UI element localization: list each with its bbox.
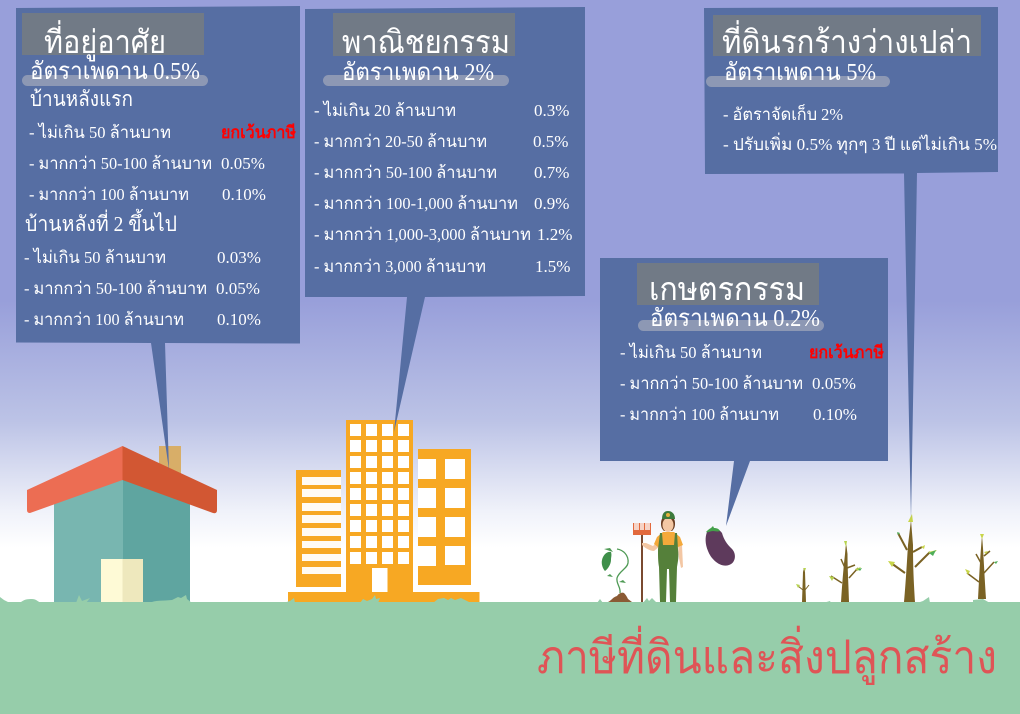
value: 0.05% <box>812 374 856 393</box>
row: - มากกว่า 3,000 ล้านบาท <box>314 257 486 276</box>
rake <box>641 534 643 602</box>
row: - มากกว่า 100-1,000 ล้านบาท <box>314 194 518 213</box>
rate bar <box>22 75 208 86</box>
row: - ไม่เกิน 50 ล้านบาท <box>29 122 171 142</box>
value: 0.10% <box>813 405 857 424</box>
row: - มากกว่า 100 ล้านบาท <box>24 310 184 329</box>
row: - ปรับเพิ่ม 0.5% ทุกๆ 3 ปี แต่ไม่เกิน 5% <box>723 132 997 155</box>
row: - มากกว่า 50-100 ล้านบาท <box>24 279 207 298</box>
panel: residential <box>16 6 300 470</box>
panel: agriculture <box>600 258 888 526</box>
value: 1.2% <box>537 225 572 244</box>
icon: eggplant <box>706 526 735 566</box>
row: - มากกว่า 50-100 ล้านบาท <box>314 163 497 182</box>
heading: ที่ดินรกร้างว่างเปล่า <box>722 20 972 60</box>
icon: office buildings <box>288 420 480 602</box>
value: 0.7% <box>534 163 569 182</box>
row: - มากกว่า 50-100 ล้านบาท <box>29 154 212 173</box>
value: 0.05% <box>216 279 260 298</box>
callout shape <box>16 6 300 470</box>
shirt <box>654 532 683 547</box>
rate bar <box>706 76 890 87</box>
value: 0.10% <box>217 310 261 329</box>
value: 0.03% <box>217 248 261 267</box>
value: 0.5% <box>533 132 568 151</box>
row: - มากกว่า 1,000-3,000 ล้านบาท <box>314 225 531 244</box>
exempt label: ยกเว้นภาษี <box>809 342 884 362</box>
row: - มากกว่า 100 ล้านบาท <box>29 185 189 204</box>
callout shape <box>704 7 998 520</box>
ceiling rate: อัตราเพดาน 5% <box>724 60 876 86</box>
arms <box>642 542 660 551</box>
row: - อัตราจัดเก็บ 2% <box>723 103 843 124</box>
value: 0.05% <box>221 154 265 173</box>
icon: house <box>27 446 217 602</box>
icon: small tree 1 <box>796 568 809 602</box>
icon: tree right <box>965 534 998 599</box>
row: - ไม่เกิน 50 ล้านบาท <box>24 247 166 267</box>
ceiling rate: อัตราเพดาน 0.2% <box>650 306 820 332</box>
heading: พาณิชยกรรม <box>342 24 510 60</box>
overalls <box>658 533 678 602</box>
row: - ไม่เกิน 20 ล้านบาท <box>314 100 456 120</box>
icon: large tree <box>888 514 937 602</box>
icon: small tree 2 <box>829 541 862 602</box>
panel: vacant land <box>704 7 998 520</box>
main title: ภาษีที่ดินและสิ่งปลูกสร้าง <box>537 625 997 685</box>
heading bar <box>22 13 204 55</box>
row: - มากกว่า 100 ล้านบาท <box>620 405 779 424</box>
value: 0.9% <box>534 194 569 213</box>
head <box>661 516 675 531</box>
ceiling rate: อัตราเพดาน 0.5% <box>30 59 200 85</box>
value: 0.10% <box>222 185 266 204</box>
ground <box>0 595 1020 714</box>
exempt label: ยกเว้นภาษี <box>221 122 296 142</box>
rate bar <box>323 75 509 86</box>
value: 1.5% <box>535 257 570 276</box>
subheading: first house: บ้านหลังแรก <box>30 87 133 111</box>
ceiling rate: อัตราเพดาน 2% <box>342 60 494 86</box>
panel: commercial <box>305 7 585 432</box>
heading bar <box>333 13 515 56</box>
heading bar <box>713 15 981 56</box>
callout shape <box>600 258 888 526</box>
row: - ไม่เกิน 50 ล้านบาท <box>620 342 762 362</box>
rate bar <box>638 320 824 331</box>
icon: seedling <box>602 548 632 602</box>
heading: เกษตรกรรม <box>649 271 805 307</box>
row: - มากกว่า 20-50 ล้านบาท <box>314 132 487 151</box>
icon: farmer with rake <box>633 511 683 602</box>
subheading: second house: บ้านหลังที่ 2 ขึ้นไป <box>25 209 177 236</box>
heading bar <box>637 263 819 305</box>
heading: ที่อยู่อาศัย <box>44 20 166 62</box>
row: - มากกว่า 50-100 ล้านบาท <box>620 374 803 393</box>
value: 0.3% <box>534 101 569 120</box>
callout shape <box>305 7 585 432</box>
